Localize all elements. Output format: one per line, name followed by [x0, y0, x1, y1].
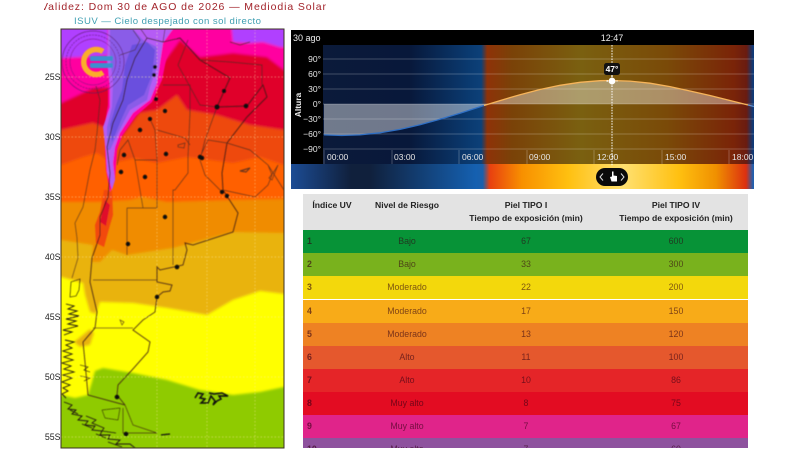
- Andes tongue: [95, 190, 113, 247]
- row 4: 4: [307, 306, 312, 316]
- latitude labels: 30S: [45, 132, 61, 142]
- row 9: 67: [671, 421, 681, 431]
- row 2: 33: [521, 259, 531, 269]
- row 9: 9: [307, 421, 312, 431]
- row 2: 300: [669, 259, 683, 269]
- slider handle: [596, 168, 628, 186]
- row 4: 150: [669, 306, 683, 316]
- row 3: 3: [307, 282, 312, 292]
- axis labels: −60°: [303, 129, 321, 139]
- axis labels: 60°: [308, 69, 321, 79]
- row 1: 67: [521, 236, 531, 246]
- table header: Nivel de Riesgo: [375, 200, 439, 210]
- latitude labels: [45, 72, 61, 442]
- row 1: Bajo: [398, 236, 416, 246]
- table header: [303, 194, 748, 230]
- hour labels: 18:00: [732, 152, 754, 162]
- hour labels: [327, 152, 754, 162]
- table header: Índice UV: [312, 200, 352, 210]
- row 5: [303, 323, 748, 346]
- altitude tooltip: [604, 63, 620, 75]
- hour labels: 06:00: [462, 152, 484, 162]
- logo watermark: [62, 31, 124, 93]
- row 4: 17: [521, 306, 531, 316]
- row 6: 6: [307, 352, 312, 362]
- latitude labels: 55S: [45, 432, 61, 442]
- latitude labels: 25S: [45, 72, 61, 82]
- Chilean coast and Patagonian fjords: [62, 279, 135, 448]
- row 1: 600: [669, 236, 683, 246]
- row 1: 1: [307, 236, 312, 246]
- axis title: Altura: [293, 92, 303, 117]
- city markers: [115, 65, 248, 436]
- hour labels: 03:00: [394, 152, 416, 162]
- row 2: 2: [307, 259, 312, 269]
- latitude labels: 50S: [45, 372, 61, 382]
- row 8: 8: [524, 398, 528, 408]
- sun marker: [606, 76, 618, 86]
- row 4: Moderado: [387, 306, 427, 316]
- row 5: 120: [669, 329, 683, 339]
- row 3: 22: [521, 282, 531, 292]
- row 6: [303, 346, 748, 369]
- table header: Tiempo de exposición (min): [619, 213, 733, 223]
- daylight colour strip: [291, 164, 754, 189]
- axis labels: 0°: [313, 99, 321, 109]
- row 5: 13: [521, 329, 531, 339]
- row 10: [303, 438, 748, 450]
- row 8: 75: [671, 398, 681, 408]
- latitude labels: 45S: [45, 312, 61, 322]
- row 9: 7: [524, 421, 528, 431]
- sun altitude chart: [291, 30, 754, 189]
- row 7: 86: [671, 375, 681, 385]
- table header: Piel TIPO IV: [652, 200, 700, 210]
- row 5: Moderado: [387, 329, 427, 339]
- row 3: [303, 276, 748, 299]
- sun altitude curve: day: [484, 80, 748, 106]
- row 6: 11: [521, 352, 531, 362]
- Malvinas islands: [161, 393, 228, 435]
- row 1: [303, 230, 748, 253]
- map frame: [61, 29, 284, 448]
- subtitle: sky condition: ISUV — Cielo despejado con sol directo: [74, 16, 261, 27]
- row 8: Muy alto: [390, 398, 424, 408]
- altitude grid lines: [323, 59, 754, 164]
- row 3: Moderado: [387, 282, 427, 292]
- date label: 30 ago: [293, 33, 321, 43]
- row 2: Bajo: [398, 259, 416, 269]
- row 7: [303, 369, 748, 392]
- hour labels: 12:00: [597, 152, 619, 162]
- row 3: 200: [669, 282, 683, 292]
- row 8: 8: [307, 398, 312, 408]
- table header: Piel TIPO I: [505, 200, 547, 210]
- table header: Tiempo de exposición (min): [469, 213, 583, 223]
- axis labels: [303, 54, 321, 154]
- country and province borders: [72, 28, 284, 433]
- latitude labels: 40S: [45, 252, 61, 262]
- time cursor: [611, 45, 613, 166]
- sun altitude curve: night: [324, 106, 484, 136]
- time label: 12:47: [601, 33, 623, 43]
- row 2: [303, 253, 748, 276]
- row 7: 10: [521, 375, 531, 385]
- row 7: 7: [307, 375, 312, 385]
- axis labels: 90°: [308, 54, 321, 64]
- row 8: [303, 392, 748, 415]
- row 6: Alto: [399, 352, 415, 362]
- row 7: Alto: [399, 375, 415, 385]
- axis labels: −30°: [303, 114, 321, 124]
- area under sun curve: [324, 104, 484, 136]
- latitude labels: 35S: [45, 192, 61, 202]
- row 9: [303, 415, 748, 438]
- row 6: 100: [669, 352, 683, 362]
- map colour bands and borders: [62, 30, 284, 448]
- row 5: 5: [307, 329, 312, 339]
- axis labels: −90°: [303, 144, 321, 154]
- altitude tooltip: 47°: [606, 64, 619, 74]
- hour labels: 09:00: [529, 152, 551, 162]
- row 4: [303, 300, 748, 323]
- title: validity date: Validez: Dom 30 de AGO de 2026 — Mediodia Solar: [41, 1, 326, 13]
- table: UV index, risk level and exposure time: [303, 194, 748, 448]
- axis labels: 30°: [308, 84, 321, 94]
- row 9: Muy alto: [390, 421, 424, 431]
- hour labels: 15:00: [665, 152, 687, 162]
- hour labels: 00:00: [327, 152, 349, 162]
- graticule: [61, 29, 284, 448]
